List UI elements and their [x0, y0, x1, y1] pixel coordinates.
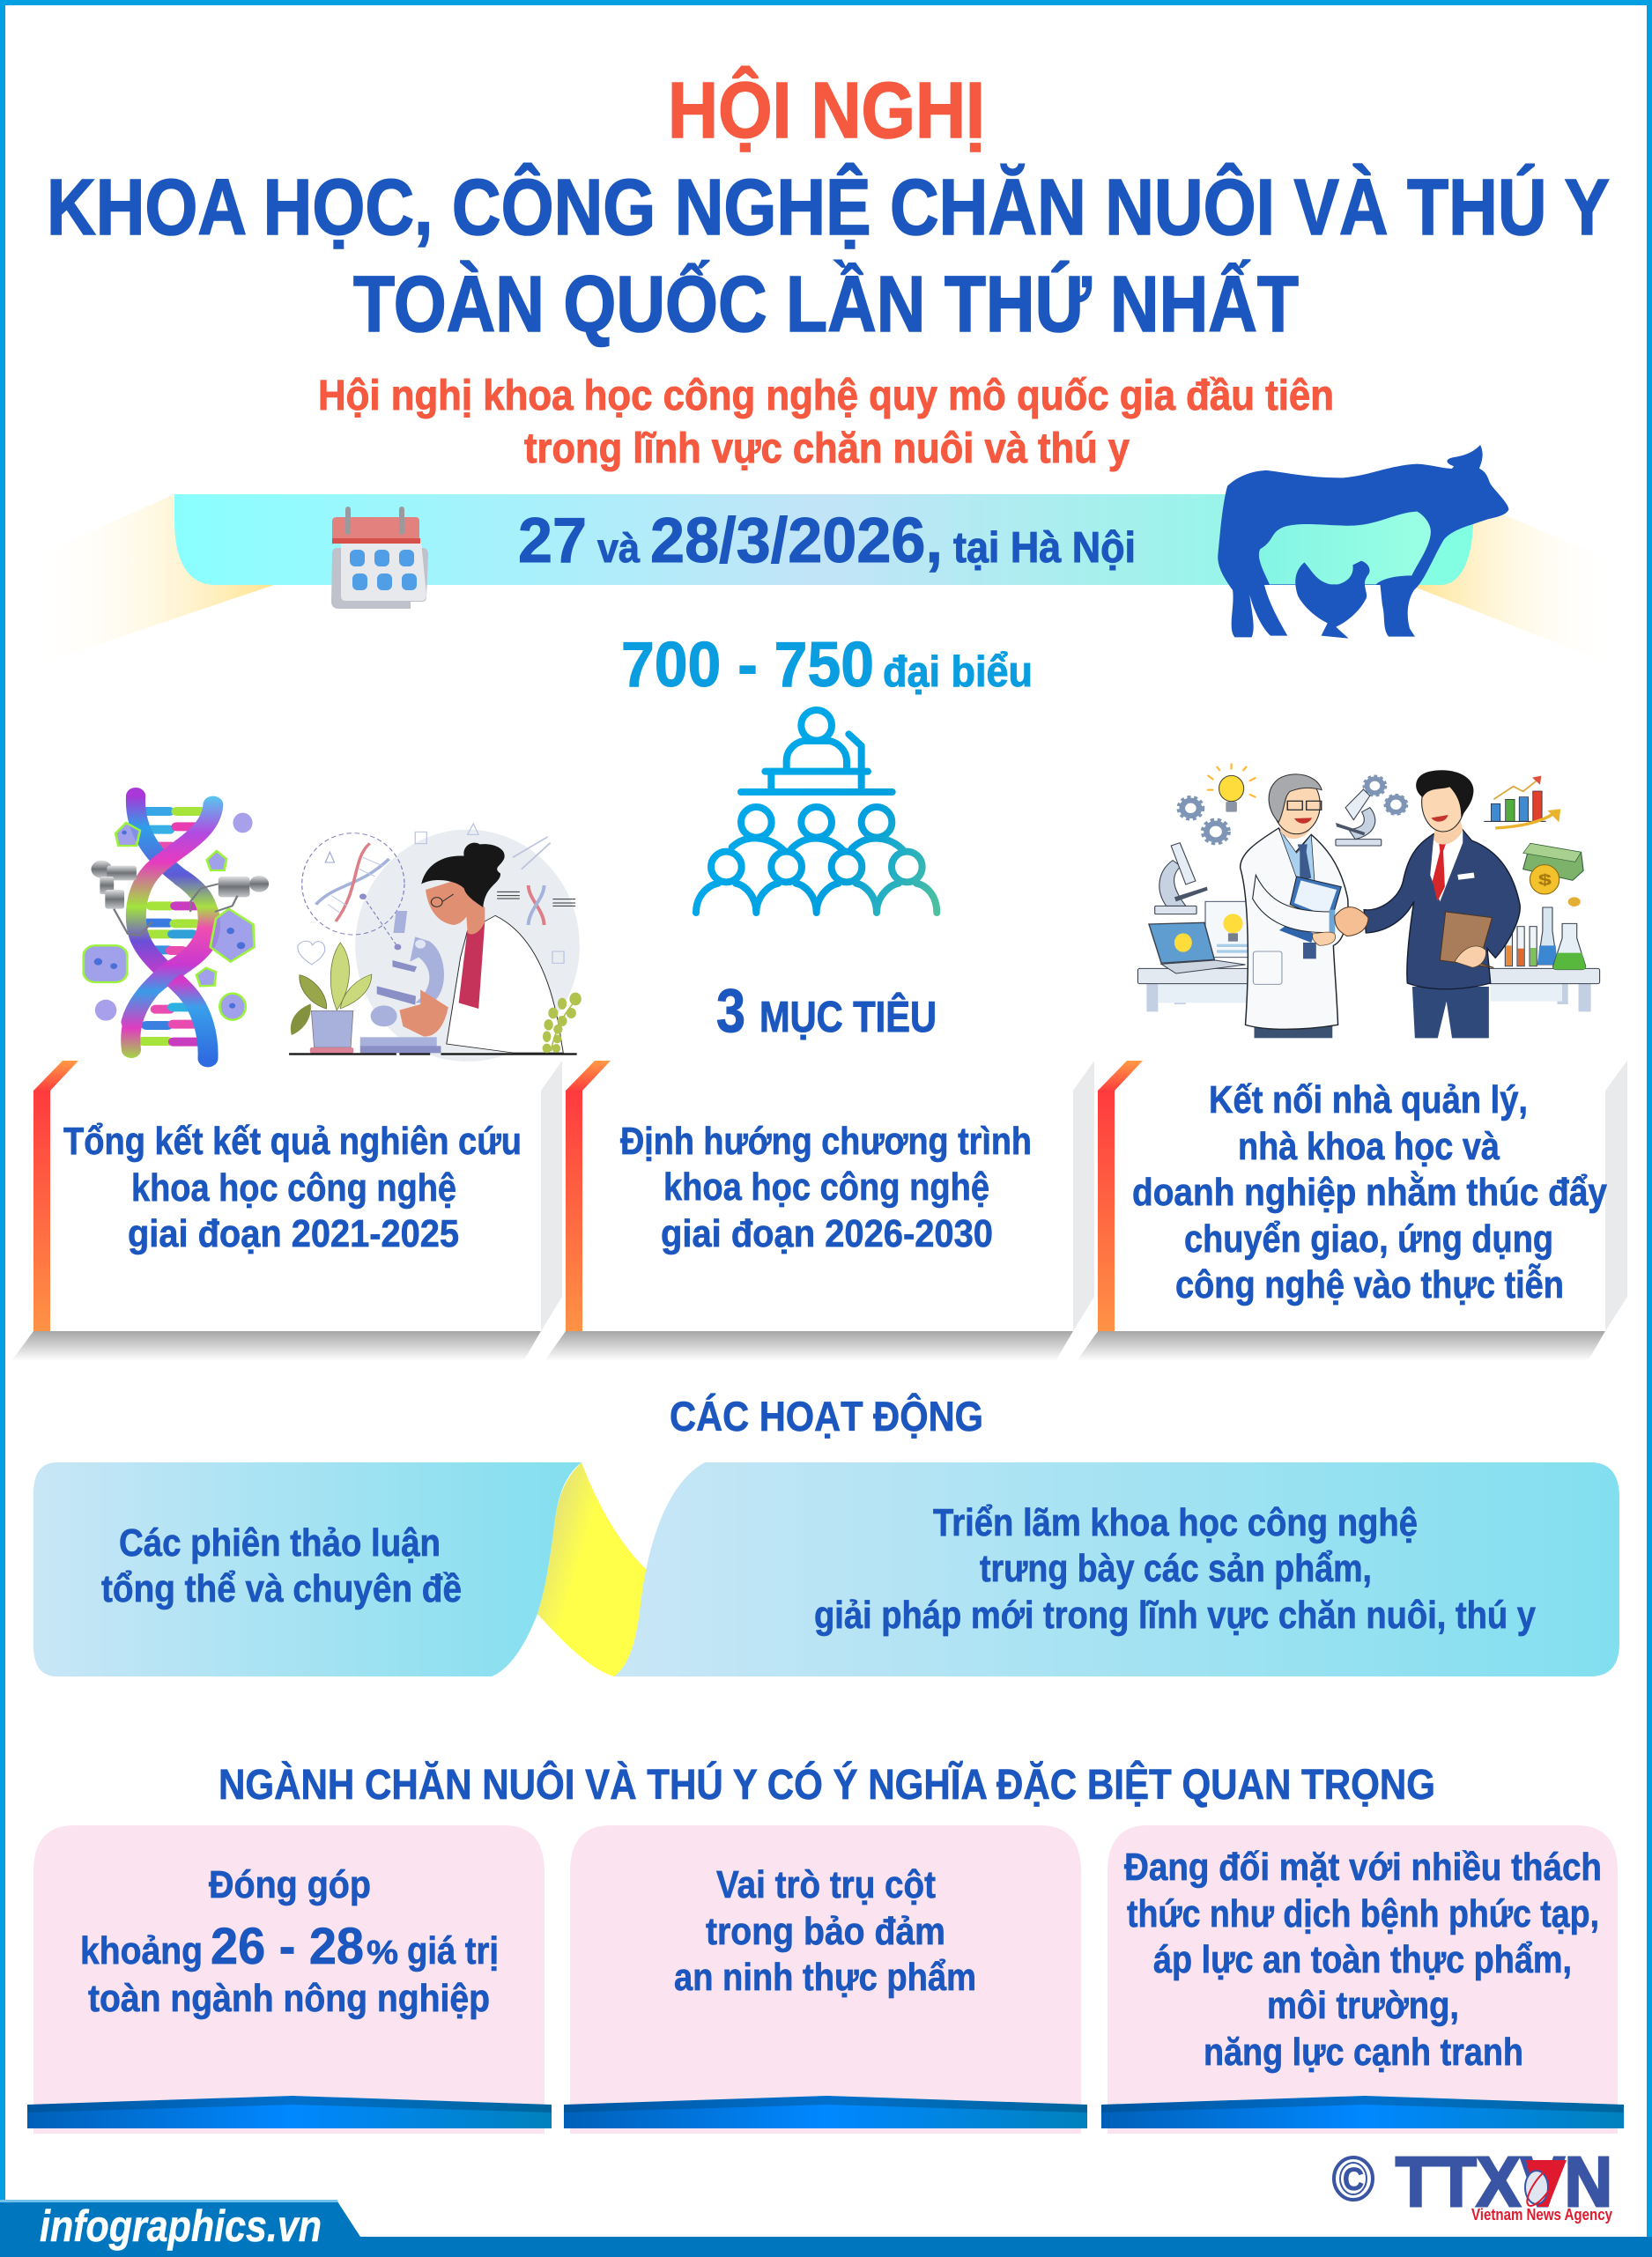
- attendees count: đại biểu: [883, 648, 1033, 696]
- clasped hands: [1335, 907, 1368, 936]
- logo: TTXVN: TTXVN: [1396, 2142, 1612, 2221]
- challenges text: môi trường,: [1267, 1984, 1459, 2027]
- objective 3 text: [1132, 1078, 1607, 1306]
- objective 3 text: nhà khoa học và: [1238, 1125, 1500, 1168]
- footer website label: infographics.vn: [40, 2202, 322, 2251]
- attendees count: [621, 630, 1033, 700]
- microscopes: [1155, 789, 1382, 914]
- contribution text: 26 - 28: [211, 1918, 364, 1975]
- objective 1 text: [63, 1120, 522, 1255]
- chart and money: [1484, 776, 1583, 906]
- plant: [291, 943, 372, 1054]
- businessman: [1364, 770, 1520, 1038]
- panel: objective 3: [1077, 1061, 1627, 1361]
- challenges text: năng lực cạnh tranh: [1204, 2031, 1523, 2074]
- objective 2 text: giai đoạn 2026-2030: [661, 1212, 993, 1255]
- title: HỘI NGHỊ: [668, 65, 985, 155]
- date text: tại Hà Nội: [953, 524, 1136, 572]
- food security text: Vai trò trụ cột: [716, 1863, 936, 1906]
- objective 3 text: công nghệ vào thực tiễn: [1175, 1262, 1564, 1306]
- objectives heading: MỤC TIÊU: [759, 993, 937, 1041]
- panel: contribution: [27, 1825, 552, 2134]
- contribution text: khoảng: [80, 1929, 203, 1972]
- illustration: scientist and businessman handshake: [1137, 764, 1600, 1038]
- activity 2: Triển lãm khoa học công nghệ: [933, 1501, 1418, 1544]
- icon: cow, sheep and chicken silhouette: [1218, 445, 1508, 639]
- objective 2 text: [620, 1120, 1032, 1255]
- dashed circle with DNA: [298, 824, 564, 965]
- woman coat: [447, 915, 563, 1053]
- objectives heading: 3: [716, 976, 745, 1045]
- activities heading: CÁC HOẠT ĐỘNG: [670, 1393, 983, 1439]
- microscope: [360, 911, 444, 1053]
- activity 2: [614, 1462, 1619, 1676]
- activity 1: Các phiên thảo luận: [119, 1521, 441, 1565]
- activity 1: tổng thể và chuyên đề: [101, 1567, 462, 1610]
- icon: calendar: [331, 507, 428, 609]
- logo: TTXVN: C: [1343, 2161, 1364, 2197]
- objective 3 text: chuyển giao, ứng dụng: [1184, 1217, 1553, 1261]
- objective 2 text: khoa học công nghệ: [663, 1166, 989, 1209]
- title: [47, 65, 1610, 349]
- activity 2: trưng bày các sản phẩm,: [980, 1547, 1372, 1590]
- lab glassware: [1505, 907, 1586, 970]
- section heading: importance: NGÀNH CHĂN NUÔI VÀ THÚ Y CÓ Ý NGHĨA ĐẶC BIỆT QUAN TRỌNG: [219, 1760, 1435, 1809]
- illustration: scientist with microscope: [289, 824, 582, 1062]
- activity 2: giải pháp mới trong lĩnh vực chăn nuôi, thú y: [814, 1594, 1536, 1637]
- contribution text: Đóng góp: [209, 1863, 371, 1906]
- objective 1 text: giai đoạn 2021-2025: [128, 1212, 459, 1255]
- icon: speaker and audience: [696, 710, 937, 913]
- illustration: DNA helix: [84, 796, 269, 1059]
- subtitle: Hội nghị khoa học công nghệ quy mô quốc gia đầu tiên: [318, 373, 1334, 419]
- contribution text: giá trị: [407, 1929, 499, 1972]
- chart and money: $: [1538, 870, 1552, 888]
- date text: và: [597, 525, 640, 571]
- subtitle: trong lĩnh vực chăn nuôi và thú y: [524, 426, 1130, 472]
- gears and bulb: [1178, 776, 1407, 844]
- contribution text: [80, 1863, 499, 2020]
- tables: [1137, 968, 1600, 1011]
- objective 1 text: khoa học công nghệ: [131, 1166, 456, 1210]
- laptop and monitor: [1149, 901, 1255, 973]
- objective 2 text: Định hướng chương trình: [620, 1120, 1032, 1163]
- chromosome: [529, 885, 544, 925]
- attendees count: 700 - 750: [621, 630, 874, 700]
- food security text: trong bảo đảm: [706, 1910, 945, 1953]
- fern: [551, 997, 579, 1051]
- objective 3 text: Kết nối nhà quản lý,: [1209, 1078, 1528, 1121]
- food security text: an ninh thực phẩm: [674, 1956, 976, 1999]
- panel: food security: [564, 1825, 1087, 2134]
- activity 1: [33, 1462, 582, 1676]
- logo: TTXVN: Vietnam News Agency: [1471, 2206, 1612, 2224]
- objectives heading: [716, 976, 937, 1045]
- panel: activities ribbon: [33, 1462, 1619, 1676]
- title: TOÀN QUỐC LẦN THỨ NHẤT: [353, 259, 1299, 349]
- food security text: [674, 1863, 976, 1999]
- date text: [518, 506, 1136, 576]
- challenges text: áp lực an toàn thực phẩm,: [1153, 1938, 1572, 1981]
- scientist: [1241, 774, 1348, 1038]
- contribution text: %: [367, 1935, 398, 1972]
- contribution text: toàn ngành nông nghiệp: [88, 1977, 490, 2020]
- date text: 27: [518, 506, 587, 576]
- date banner: [32, 445, 1621, 667]
- objective 1 text: Tổng kết kết quả nghiên cứu: [63, 1120, 522, 1163]
- subtitle: [318, 373, 1334, 472]
- panel: challenges: [1101, 1825, 1624, 2134]
- footer band: [0, 2200, 1652, 2257]
- panel: objective 2: [544, 1061, 1094, 1361]
- challenges text: [1124, 1846, 1602, 2074]
- panel: objective 1: [11, 1061, 562, 1361]
- date text: 28/3/2026,: [650, 506, 943, 576]
